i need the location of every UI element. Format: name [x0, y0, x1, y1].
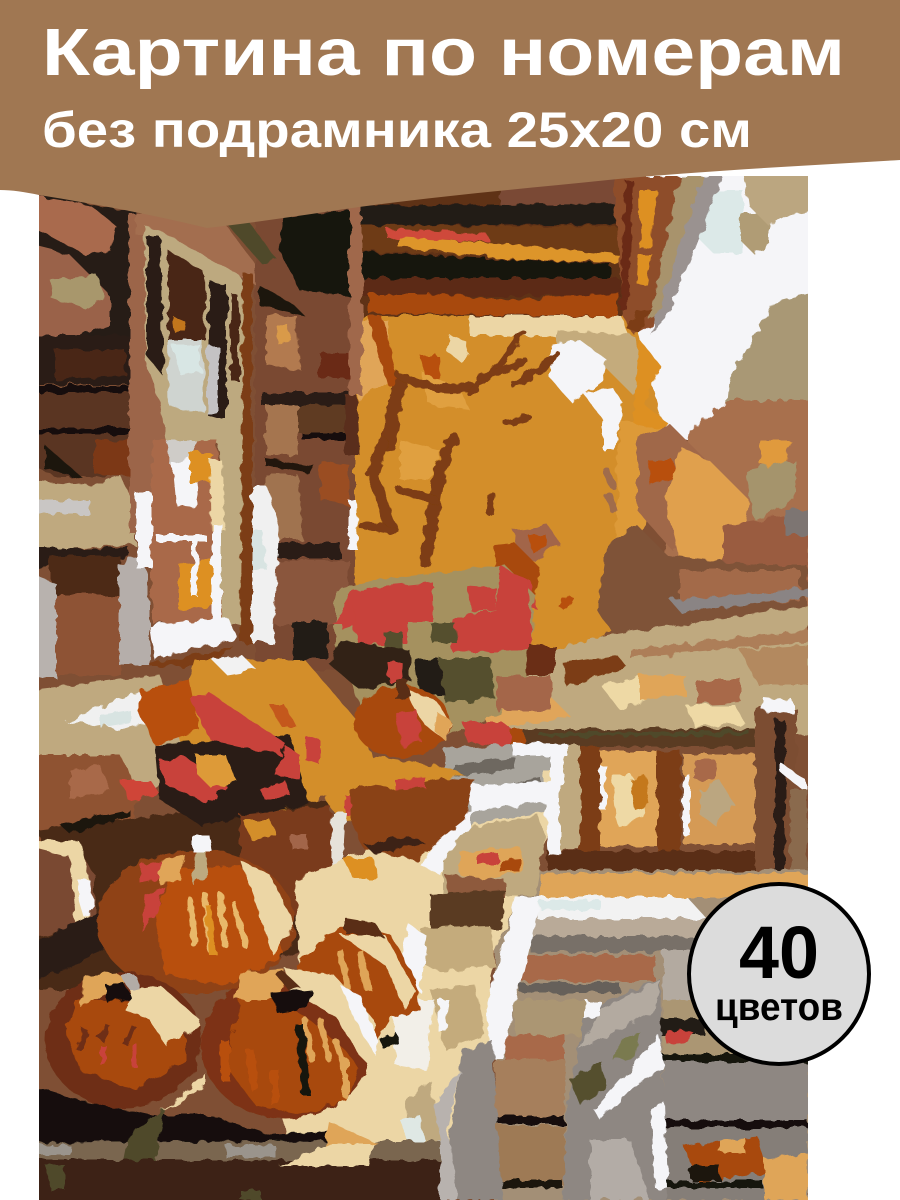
orange tree: [352, 310, 672, 650]
log wall left: [0, 190, 149, 678]
painting: autumn porch with pumpkins: [0, 170, 820, 1200]
ledge left: [29, 675, 339, 990]
badge number: 40: [739, 911, 819, 994]
pumpkin back: [97, 836, 295, 994]
ceiling beams: [360, 190, 623, 318]
white tablecloth: [281, 742, 568, 1200]
roof rafter: [613, 176, 723, 334]
log wall right: [226, 205, 362, 670]
bowl: [343, 765, 475, 878]
small pumpkin: [354, 680, 530, 758]
far autumn trees: [597, 293, 820, 640]
grey drape: [563, 979, 668, 1200]
stone steps right: [480, 870, 810, 1200]
title: Картина по номерам: [42, 15, 845, 90]
pumpkin left: [45, 972, 201, 1108]
subtitle: без подрамника 25х20 см: [42, 102, 752, 158]
branch dabs: [420, 335, 570, 610]
ground field: [480, 605, 810, 735]
sky: [638, 176, 808, 440]
flower bunch: [140, 655, 440, 920]
badge label: цветов: [715, 986, 843, 1029]
flowers in pot: [330, 565, 555, 745]
dark base: [30, 1074, 440, 1200]
pumpkin front: [201, 968, 378, 1119]
pumpkin right: [296, 918, 420, 1060]
badge: 40 colours: [689, 884, 869, 1064]
header banner: [0, 0, 900, 228]
window: [129, 212, 279, 666]
tree branches: [362, 313, 614, 562]
fence: [523, 697, 808, 885]
